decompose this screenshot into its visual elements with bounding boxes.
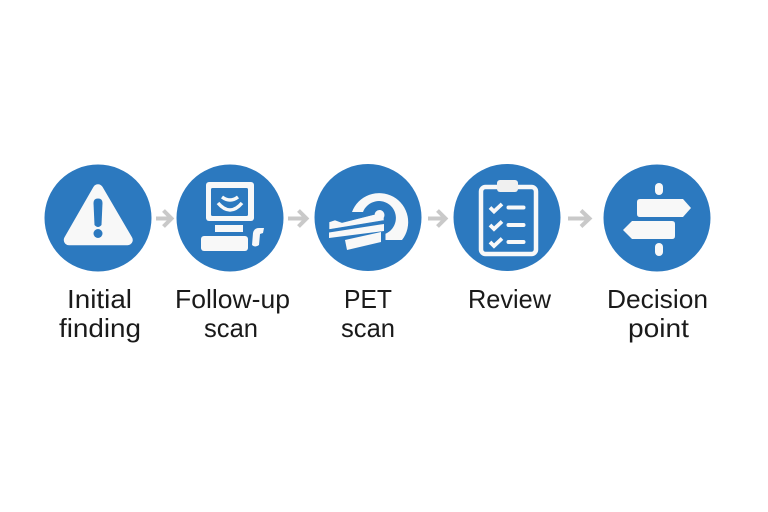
step 2: follow-up scan <box>175 164 290 343</box>
label: follow-up scan: scan <box>204 313 258 343</box>
label: follow-up scan: Follow-up <box>175 284 290 314</box>
icon: PET scanner <box>329 193 408 250</box>
label: PET scan: PET <box>344 284 392 314</box>
icon: scanner workstation <box>201 182 264 251</box>
icon: clipboard checklist <box>481 180 536 254</box>
step 5: decision point <box>604 164 710 343</box>
circle: step 3 <box>314 164 422 271</box>
step 3: PET scan <box>314 164 422 343</box>
label: initial finding: finding <box>59 313 141 343</box>
label: decision point <box>607 284 708 343</box>
step 4: review <box>454 164 560 314</box>
arrow 4 <box>568 210 590 226</box>
icon: signpost <box>623 183 691 256</box>
arrow 2 <box>288 210 306 226</box>
label: initial finding: Initial <box>67 284 132 314</box>
label: PET scan <box>341 284 395 343</box>
icon: warning triangle <box>69 190 128 240</box>
step 1: initial finding <box>44 164 152 343</box>
circle: step 4 <box>454 164 560 271</box>
circle: step 2 <box>176 164 284 272</box>
label: review: Review <box>468 284 551 314</box>
circle: step 5 <box>604 164 710 272</box>
arrow 1 <box>156 210 172 226</box>
label: initial finding <box>59 284 141 343</box>
circle: step 1 <box>44 164 152 272</box>
label: PET scan: scan <box>341 313 395 343</box>
label: follow-up scan <box>175 284 290 343</box>
label: decision point: Decision <box>607 284 708 314</box>
arrow 3 <box>428 210 446 226</box>
label: decision point: point <box>628 313 690 343</box>
